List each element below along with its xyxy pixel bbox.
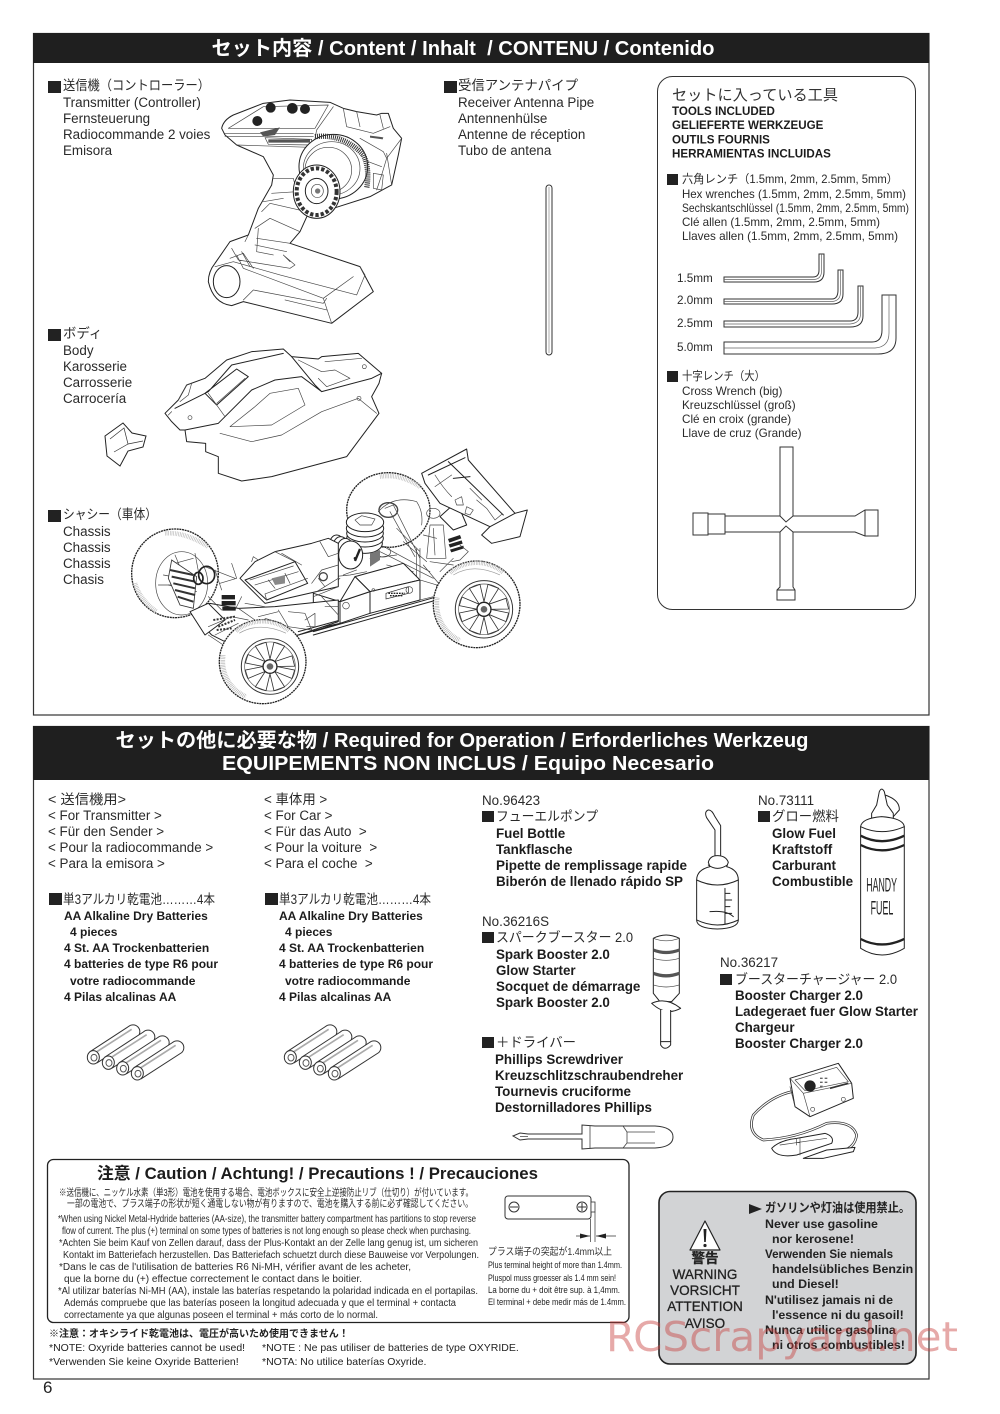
heading: required for operation: EQUIPEMENTS NON INCLUS / Equipo Necesario [222, 753, 714, 775]
text: transmitter: 送信機（コントローラー） [63, 78, 210, 93]
icon: warning triangle [690, 1221, 720, 1250]
note: oxyride batteries: *Verwenden Sie keine Oxyride Batterien! [49, 1356, 239, 1368]
column: for transmitter: < For Transmitter > [48, 808, 162, 823]
text: cross wrench: 十字レンチ（大） [682, 369, 765, 383]
text: body: Carrocería [63, 391, 127, 406]
warning text: l'essence ni du gasoil! [772, 1308, 904, 1322]
text: booster charger: Ladegeraet fuer Glow Starter [735, 1004, 919, 1019]
illustration: spark booster [652, 935, 681, 1048]
column: for transmitter: < Pour la radiocommande > [48, 840, 213, 855]
text: glow fuel [758, 793, 853, 889]
caution text: correctamente ya que algunas poseen el terminal + más corto de lo normal. [64, 1310, 378, 1321]
text: transmitter: Transmitter (Controller) [63, 95, 201, 110]
rear suspension [370, 503, 468, 585]
note: terminal height: El terminal + debe medir más de 1.4mm. [488, 1297, 626, 1307]
panel: tools included [658, 76, 916, 610]
caution text [58, 1186, 479, 1321]
text: spark booster: Socquet de démarrage [496, 979, 640, 994]
text: phillips screwdriver: Destornilladores Phillips [495, 1100, 652, 1115]
text: hex wrenches: 六角レンチ（1.5mm, 2mm, 2.5mm, 5mm） [682, 172, 898, 186]
text: spark booster: Glow Starter [496, 963, 576, 978]
text: body [48, 325, 132, 406]
text: cross wrench [667, 369, 802, 440]
text: cross wrench: Cross Wrench (big) [682, 385, 783, 398]
front half of buggy [132, 529, 338, 704]
text: body: Karosserie [63, 359, 127, 374]
warning labels [667, 1250, 743, 1331]
column: for transmitter: 4 pieces [70, 925, 118, 939]
panel: content [33, 33, 929, 715]
caution text: que la borne du (+) effectue correctement le contact dans le boitier. [64, 1274, 362, 1285]
illustration: handy fuel bottle: HANDY [866, 876, 897, 897]
tools heading: GELIEFERTE WERKZEUGE [672, 119, 824, 132]
text: fuel bottle: Biberón de llenado rápido SP [496, 874, 683, 889]
illustration: batteries for transmitter [87, 1025, 184, 1080]
heading: content [33, 33, 929, 63]
illustration: handy fuel bottle [861, 789, 904, 955]
caution text: *Dans le cas de l'utilisation de batteries R6 Ni-MH, vérifier avant de les acheter, [59, 1262, 411, 1273]
rear tire [433, 561, 520, 648]
far left tire [132, 529, 218, 618]
column: for car: votre radiocommande [285, 974, 411, 988]
text: transmitter: Emisora [63, 143, 113, 158]
text: fuel bottle: フューエルポンプ [496, 809, 599, 824]
chassis plate [190, 597, 338, 647]
text: booster charger: Booster Charger 2.0 [735, 1036, 863, 1051]
caution text: Kontakt im Batteriefach herzustellen. Das Batteriefach schuetzt durch diese Bauweise vor Verpolungen. [63, 1250, 479, 1261]
illustration: batteries for car [284, 1025, 381, 1080]
text: transmitter: Fernsteuerung [63, 111, 150, 126]
illustration: hex wrench set: 1.5mm [677, 272, 713, 285]
text: antenna pipe: Receiver Antenna Pipe [458, 95, 594, 110]
illustration: cross wrench [693, 447, 878, 600]
text: fuel bottle: No.96423 [482, 793, 540, 808]
text: booster charger: Chargeur [735, 1020, 795, 1035]
warning labels: AVISO [685, 1316, 725, 1331]
note: terminal height [488, 1245, 626, 1307]
warning text: Verwenden Sie niemals [765, 1247, 893, 1261]
page number: 6 [43, 1378, 52, 1397]
text: cross wrench: Llave de cruz (Grande) [682, 427, 802, 440]
text: booster charger: ブースターチャージャー 2.0 [735, 971, 897, 987]
text: hex wrenches: Sechskantschlüssel (1.5mm, 2mm, 2.5mm, 5mm) [682, 202, 909, 215]
text: antenna pipe: Antenne de réception [458, 127, 585, 142]
note: oxyride batteries [49, 1327, 519, 1368]
warning text: Never use gasoline [765, 1217, 878, 1231]
text: spark booster: No.36216S [482, 914, 549, 929]
illustration: antenna pipe [546, 185, 552, 355]
text: fuel bottle [482, 793, 687, 889]
text: spark booster [482, 914, 640, 1010]
text: spark booster: Spark Booster 2.0 [496, 947, 610, 962]
warning text: und Diesel! [772, 1277, 839, 1291]
text: phillips screwdriver: Phillips Screwdriver [495, 1052, 624, 1067]
text: glow fuel: No.73111 [758, 793, 814, 808]
illustration: handy fuel bottle: FUEL [871, 898, 893, 919]
panel: warning [659, 1192, 916, 1364]
caution text: *Achten Sie beim Kauf von Zellen darauf, dass der Plus-Kontakt an der Zelle lang genug ist, um sicheren [59, 1238, 478, 1249]
note: oxyride batteries: *NOTE : Ne pas utiliser de batteries de type OXYRIDE. [262, 1342, 519, 1354]
column: for transmitter: < Für den Sender > [48, 824, 164, 839]
text: glow fuel: Glow Fuel [772, 826, 836, 841]
text: chassis: シャシー（車体） [63, 507, 157, 522]
column: for car: AA Alkaline Dry Batteries [279, 909, 423, 923]
column: for car: < 車体用 > [264, 792, 327, 807]
illustration: hex wrench set [677, 254, 896, 354]
column: for car: < For Car > [264, 808, 333, 823]
column: for transmitter: 単3アルカリ乾電池………4本 [63, 892, 216, 907]
tools heading: OUTILS FOURNIS [672, 134, 770, 146]
text: cross wrench: Kreuzschlüssel (groß) [682, 399, 796, 412]
engine [346, 513, 384, 567]
note: oxyride batteries: *NOTA: No utilice baterías Oxyride. [262, 1356, 426, 1368]
heading: required for operation: セットの他に必要な物 / Required for Operation / Erforderliches Werkzeug [116, 729, 808, 752]
heading: content: セット内容 / Content / Inhalt / CONTENU / Contenido [212, 37, 714, 60]
text: antenna pipe: Tubo de antena [458, 143, 552, 158]
illustration: hex wrench set: 2.0mm [677, 294, 713, 307]
illustration: transmitter [208, 100, 402, 323]
column: for transmitter: AA Alkaline Dry Batteries [64, 909, 208, 923]
rear half of buggy [313, 449, 527, 648]
panel: caution [48, 1160, 629, 1322]
column: for car: < Für das Auto > [264, 824, 367, 839]
warning text [749, 1200, 913, 1352]
text: chassis: Chassis [63, 524, 111, 539]
text: booster charger: Booster Charger 2.0 [735, 988, 863, 1003]
text: glow fuel: Combustible [772, 874, 853, 889]
text: transmitter [48, 78, 211, 158]
column: for transmitter [48, 792, 218, 1004]
text: chassis: Chasis [63, 572, 104, 587]
far right tire [347, 473, 430, 547]
text: glow fuel: グロー燃料 [772, 808, 839, 824]
heading: required for operation [33, 726, 929, 780]
warning text: N'utilisez jamais ni de [765, 1293, 893, 1307]
illustration: body mount [105, 423, 146, 466]
text: phillips screwdriver [482, 1035, 684, 1115]
front shocks [163, 558, 237, 630]
column: for car: 4 pieces [285, 925, 333, 939]
text: hex wrenches: Llaves allen (1.5mm, 2mm, 2.5mm, 5mm) [682, 230, 898, 243]
text: fuel bottle: Tankflasche [496, 842, 572, 857]
column: for transmitter: 4 Pilas alcalinas AA [64, 990, 177, 1004]
text: antenna pipe: Antennenhülse [458, 111, 547, 126]
column: for car: 単3アルカリ乾電池………4本 [279, 892, 432, 907]
caution text: *Al utilizar baterías Ni-MH (AA), instale las baterías respetando la polaridad indicada en el portapilas. [58, 1286, 478, 1297]
warning text: handelsübliches Benzin [772, 1262, 913, 1276]
note: terminal height: Plus terminal height of more than 1.4mm. [488, 1260, 622, 1270]
column: for transmitter: 4 batteries de type R6 pour [64, 957, 218, 971]
column: for transmitter: < Para la emisora > [48, 856, 165, 871]
tools heading: HERRAMIENTAS INCLUIDAS [672, 148, 831, 160]
note: oxyride batteries: *NOTE: Oxyride batteries cannot be used! [49, 1342, 245, 1354]
column: for car: 4 Pilas alcalinas AA [279, 990, 392, 1004]
panel: required for operation [33, 726, 929, 1379]
column: for car: 4 St. AA Trockenbatterien [279, 941, 424, 955]
note: terminal height: Pluspol muss groesser als 1.4 mm sein! [488, 1273, 616, 1283]
text: body: Body [63, 343, 94, 358]
text: phillips screwdriver: Kreuzschlitzschraubendreher [495, 1068, 684, 1083]
caution text: *When using Nickel Metal-Hydride batteries (AA-size), the transmitter battery compartment has partitions to stop reverse [58, 1214, 476, 1225]
caution text: 一部の電池で、プラス端子の形状が短く通電しない物が有りますので、電池を購入する前に必ず確認してください。 [67, 1197, 473, 1210]
warning text: ガソリンや灯油は使用禁止。 [765, 1200, 910, 1215]
caution text: Además compruebe que las baterías poseen la longitud adecuada y que el terminal + contacta [64, 1298, 456, 1309]
rear wing [422, 449, 527, 543]
text: transmitter: Radiocommande 2 voies [63, 127, 211, 142]
text: body: ボディ [63, 325, 102, 341]
warning text: Nunca utilice gasolina [765, 1323, 896, 1337]
text: antenna pipe: 受信アンテナパイプ [458, 78, 579, 93]
tools heading: セットに入っている工具 [672, 87, 838, 104]
illustration: body shell [165, 349, 382, 481]
column: for transmitter: 4 St. AA Trockenbatterien [64, 941, 209, 955]
column: for car: < Para el coche > [264, 856, 373, 871]
text: cross wrench: Clé en croix (grande) [682, 413, 791, 426]
illustration: fuel bottle [697, 810, 738, 929]
text: spark booster: Spark Booster 2.0 [496, 995, 610, 1010]
fuel tank [240, 538, 338, 603]
illustration: booster charger [751, 1063, 857, 1158]
text: fuel bottle: Pipette de remplissage rapide [496, 858, 687, 873]
tools heading [672, 87, 838, 160]
column: for transmitter: < 送信機用> [48, 792, 126, 807]
text: chassis: Chassis [63, 540, 111, 555]
text: hex wrenches: Hex wrenches (1.5mm, 2mm, 2.5mm, 5mm) [682, 188, 906, 201]
warning text: nor kerosene! [772, 1232, 854, 1246]
text: hex wrenches: Clé allen (1.5mm, 2mm, 2.5mm, 5mm) [682, 216, 880, 229]
note: terminal height: プラス端子の突起が1.4mm以上 [488, 1245, 612, 1258]
column: for car: < Pour la voiture > [264, 840, 377, 855]
column: for car: 4 batteries de type R6 pour [279, 957, 433, 971]
caution text: ※送信機に、ニッケル水素（単3形）電池を使用する場合、電池ボックスに安全上逆接防止リブ（仕切り）が付いています。 [59, 1186, 473, 1199]
column: for car [264, 792, 433, 1004]
text: fuel bottle: Fuel Bottle [496, 826, 565, 841]
text: spark booster: スパークブースター 2.0 [496, 929, 633, 945]
diagram: battery terminal height [505, 1196, 616, 1242]
column: for transmitter: votre radiocommande [70, 974, 196, 988]
text: booster charger [720, 955, 919, 1051]
illustration: buggy chassis [132, 449, 527, 704]
caution text: flow of current. The plus (+) terminal on some types of batteries is not long enough so please check when purchasing. [62, 1226, 471, 1237]
warning labels: VORSICHT [670, 1283, 740, 1298]
text: glow fuel: Kraftstoff [772, 842, 833, 857]
illustration: hex wrench set: 5.0mm [677, 341, 713, 354]
caution heading: 注意 / Caution / Achtung! / Precautions ! / Precauciones [97, 1164, 538, 1183]
note: oxyride batteries: ※注意：オキシライド乾電池は、電圧が高いため使用できません！ [49, 1327, 349, 1340]
illustration: screwdriver [513, 1125, 673, 1149]
text: chassis [48, 507, 157, 587]
exhaust [329, 535, 363, 569]
warning text: ni otros combustibles! [772, 1338, 905, 1352]
text: hex wrenches [667, 172, 909, 243]
text: antenna pipe [444, 78, 594, 158]
text: booster charger: No.36217 [720, 955, 778, 970]
text: phillips screwdriver: ＋ドライバー [496, 1035, 576, 1050]
note: terminal height: La borne du + doit être sup. à 1,4mm. [488, 1285, 620, 1295]
warning labels: ATTENTION [667, 1299, 743, 1314]
front tire [219, 620, 306, 704]
warning labels: WARNING [673, 1267, 737, 1282]
text: body: Carrosserie [63, 375, 132, 390]
warning labels: 警告 [692, 1250, 718, 1266]
radio boxes [313, 563, 437, 635]
text: glow fuel: Carburant [772, 858, 837, 873]
tools heading: TOOLS INCLUDED [672, 105, 775, 118]
text: phillips screwdriver: Tournevis cruciforme [495, 1084, 631, 1099]
illustration: hex wrench set: 2.5mm [677, 317, 713, 330]
watermark: RCScrapyard.net [606, 1313, 958, 1361]
text: chassis: Chassis [63, 556, 111, 571]
